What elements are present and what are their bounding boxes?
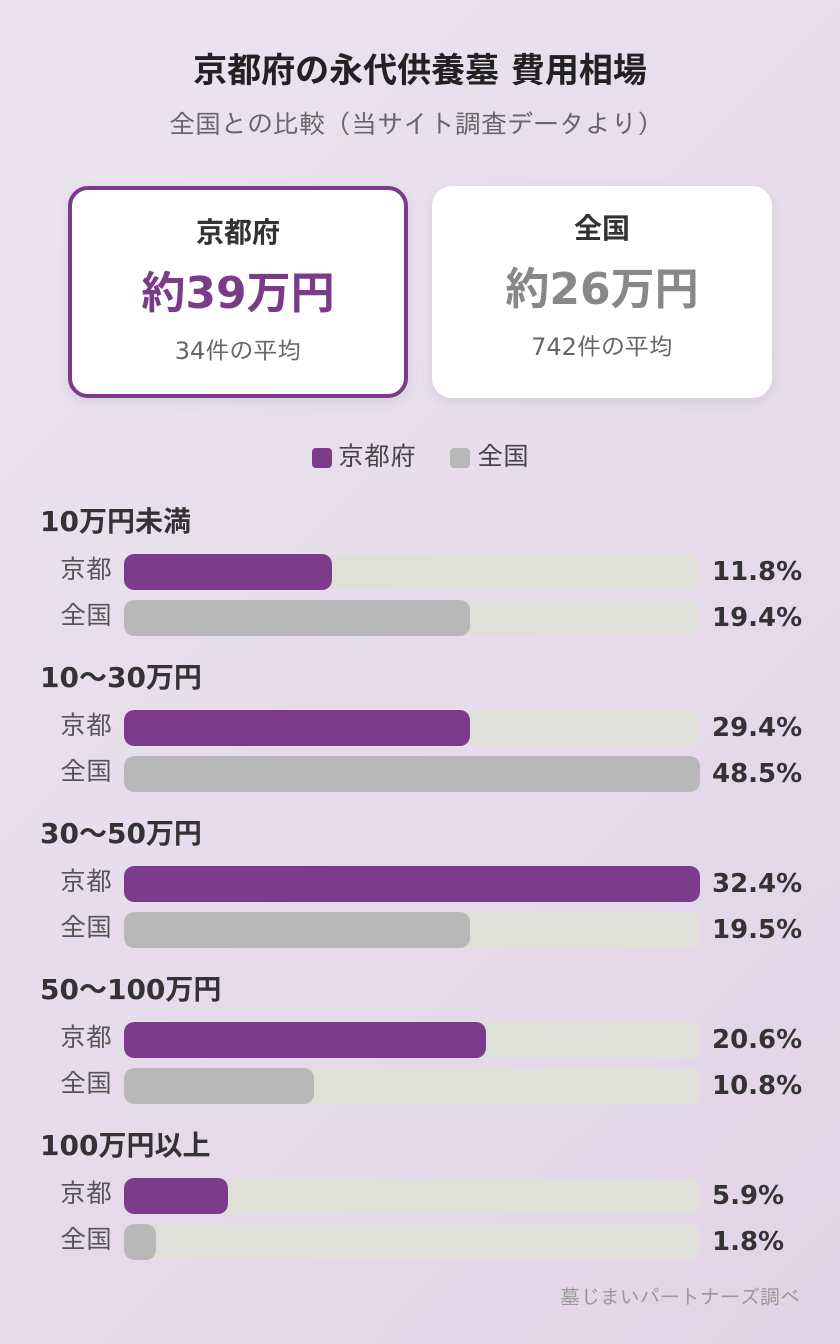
value: 32.4% (712, 869, 802, 899)
row label: national: 全国 (60, 1225, 112, 1255)
heading: under 100k yen: 10万円未満 (40, 505, 191, 538)
value: 10.8% (712, 1071, 802, 1101)
value: 19.4% (712, 603, 802, 633)
bar: Kyoto 300k-500k (124, 866, 700, 902)
legend swatch: Kyoto (312, 448, 332, 468)
value: 48.5% (712, 759, 802, 789)
bar: Kyoto under 100k (124, 554, 700, 590)
bar: Kyoto 1M and over (124, 1178, 700, 1214)
row label: Kyoto: 京都 (60, 555, 112, 585)
row label: national: 全国 (60, 913, 112, 943)
legend (312, 442, 529, 472)
Kyoto average price: 約39万円 (141, 268, 335, 319)
national sample count: 742件の平均 (531, 333, 673, 361)
value: 11.8% (712, 557, 802, 587)
legend label: national: 全国 (477, 442, 529, 472)
source note: 墓じまいパートナーズ調べ (560, 1285, 800, 1309)
row label: Kyoto: 京都 (60, 1179, 112, 1209)
subtitle: 全国との比較（当サイト調査データより） (169, 110, 663, 140)
heading: 300k-500k yen: 30〜50万円 (40, 817, 202, 850)
legend swatch: national (450, 448, 470, 468)
value: 5.9% (712, 1181, 784, 1211)
Kyoto card label: 京都府 (196, 216, 280, 249)
panel: national card (432, 186, 772, 398)
title: 京都府の永代供養墓 費用相場 (193, 51, 647, 91)
bar: national under 100k (124, 600, 700, 636)
bar: Kyoto 500k-1M (124, 1022, 700, 1058)
legend label: Kyoto: 京都府 (338, 442, 416, 472)
value: 29.4% (712, 713, 802, 743)
row label: Kyoto: 京都 (60, 1023, 112, 1053)
panel: Kyoto card (68, 186, 408, 398)
row label: Kyoto: 京都 (60, 867, 112, 897)
heading: 1M yen and over: 100万円以上 (40, 1129, 210, 1162)
row label: Kyoto: 京都 (60, 711, 112, 741)
row label: national: 全国 (60, 601, 112, 631)
row label: national: 全国 (60, 757, 112, 787)
national average price: 約26万円 (505, 264, 699, 315)
value: 1.8% (712, 1227, 784, 1257)
value: 20.6% (712, 1025, 802, 1055)
heading: 500k-1M yen: 50〜100万円 (40, 973, 221, 1006)
bar: Kyoto 100k-300k (124, 710, 700, 746)
bar: national 500k-1M (124, 1068, 700, 1104)
heading: 100k-300k yen: 10〜30万円 (40, 661, 202, 694)
bar: national 100k-300k (124, 756, 700, 792)
national card label: 全国 (574, 212, 630, 245)
row label: national: 全国 (60, 1069, 112, 1099)
value: 19.5% (712, 915, 802, 945)
bar: national 300k-500k (124, 912, 700, 948)
Kyoto sample count: 34件の平均 (175, 337, 301, 365)
bar: national 1M and over (124, 1224, 700, 1260)
